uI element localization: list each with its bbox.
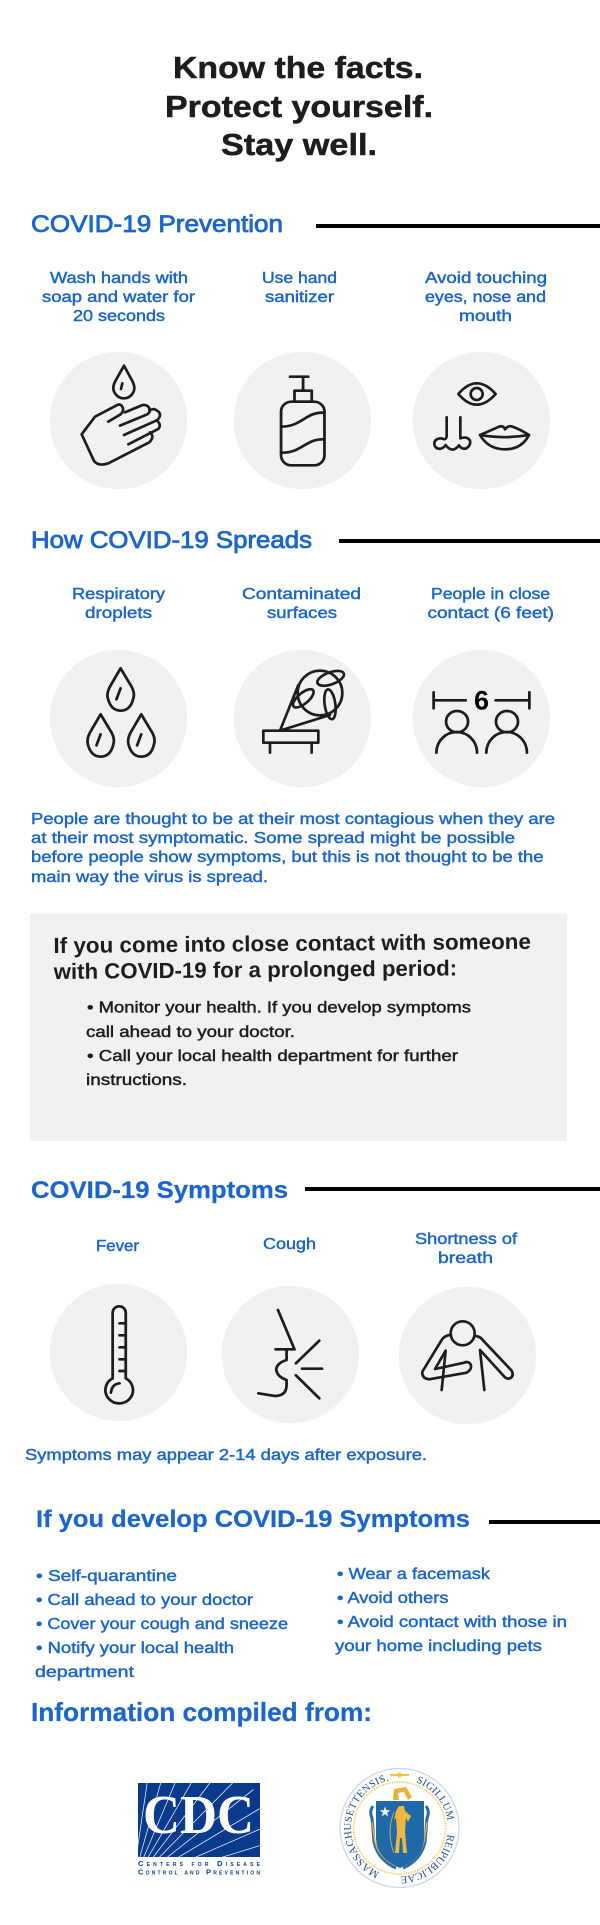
callout heading: If you come into close contact with someone <box>53 929 531 958</box>
logo: CDC: CDC <box>143 1784 254 1845</box>
title: Stay well. <box>221 127 377 162</box>
label: close contact: People in close <box>431 586 550 603</box>
label: respiratory droplets <box>72 586 165 622</box>
title: Know the facts. <box>173 50 423 85</box>
label: respiratory droplets: droplets <box>85 605 152 622</box>
icon: six feet distance: 6 <box>474 686 489 716</box>
icon: sanitizer bottle <box>234 352 371 489</box>
text block: contagion paragraph: main way the virus is spread. <box>31 869 268 886</box>
logo: Massachusetts state seal: REIPUBLICAE <box>401 1834 454 1884</box>
callout instructions: • Monitor your health. If you develop symptoms <box>87 1000 471 1016</box>
logo: Massachusetts state seal <box>339 1768 460 1888</box>
label: avoid touching: eyes, nose and <box>425 289 546 306</box>
label: contaminated surfaces: Contaminated <box>242 586 361 603</box>
logo: CDC: Control and Prevention <box>138 1868 260 1876</box>
list: left actions: • Cover your cough and sneeze <box>36 1616 288 1633</box>
list: right actions <box>335 1566 567 1655</box>
heading: information compiled from: Information compiled from: <box>31 1697 372 1727</box>
icon: contaminated surface <box>234 650 371 787</box>
label: hand sanitizer: sanitizer <box>265 289 335 306</box>
icon: shortness of breath <box>399 1287 536 1424</box>
icon: hand and water drop <box>50 352 187 489</box>
label: fever: Fever <box>96 1238 140 1255</box>
text block: contagion paragraph: before people show symptoms, but this is not thought to be the <box>31 849 544 866</box>
label: avoid touching: Avoid touching <box>425 270 547 287</box>
label: wash hands: 20 seconds <box>73 308 165 325</box>
callout instructions: call ahead to your doctor. <box>86 1024 295 1041</box>
label: hand sanitizer: Use hand <box>262 270 337 287</box>
icon: six feet distance <box>413 650 550 787</box>
list: right actions: your home including pets <box>335 1638 542 1655</box>
label: close contact <box>428 586 554 622</box>
heading: develop symptoms: If you develop COVID-19 Symptoms <box>36 1506 470 1533</box>
label: contaminated surfaces <box>242 586 361 622</box>
panel: if you develop symptoms <box>35 1506 600 1681</box>
logo: CDC <box>138 1783 260 1874</box>
heading: spreads: How COVID-19 Spreads <box>31 527 312 554</box>
label: contaminated surfaces: surfaces <box>267 605 337 622</box>
list: left actions <box>35 1568 288 1681</box>
title: Protect yourself. <box>165 89 433 124</box>
heading: prevention: COVID-19 Prevention <box>31 211 283 238</box>
panel: COVID-19 prevention <box>31 211 600 489</box>
icon: cough <box>222 1286 359 1423</box>
label: wash hands: soap and water for <box>42 289 196 306</box>
icon: three droplets <box>50 650 187 787</box>
logo: CDC: Centers for Disease <box>138 1859 261 1868</box>
label: shortness of breath: breath <box>438 1250 493 1267</box>
callout heading <box>52 929 531 984</box>
label: cough: Cough <box>263 1236 316 1253</box>
list: right actions: • Wear a facemask <box>337 1566 491 1583</box>
panel: sources <box>31 1697 460 1888</box>
panel: COVID-19 symptoms <box>25 1177 600 1464</box>
logo: Massachusetts state seal: SIGILLUM <box>416 1776 454 1820</box>
label: wash hands: Wash hands with <box>50 270 188 287</box>
panel: how COVID-19 spreads <box>31 527 600 886</box>
list: left actions: • Self-quarantine <box>36 1568 177 1585</box>
callout instructions: instructions. <box>86 1072 187 1089</box>
label: hand sanitizer <box>262 270 337 306</box>
panel: close contact callout <box>30 914 567 1141</box>
label: close contact: contact (6 feet) <box>428 605 554 622</box>
label: shortness of breath <box>415 1231 518 1267</box>
text: symptom onset: Symptoms may appear 2-14 days after exposure. <box>25 1447 427 1464</box>
callout heading: with COVID-19 for a prolonged period: <box>53 955 457 984</box>
text block: contagion paragraph: at their most symptomatic. Some spread might be possible <box>31 830 515 847</box>
heading: symptoms: COVID-19 Symptoms <box>31 1177 288 1204</box>
label: avoid touching: mouth <box>459 308 512 325</box>
label: avoid touching <box>425 270 547 325</box>
logo: Massachusetts state seal: MASSACHUSETTENSIS. <box>344 1775 388 1878</box>
label: shortness of breath: Shortness of <box>415 1231 518 1248</box>
title <box>165 50 433 162</box>
label: respiratory droplets: Respiratory <box>72 586 165 603</box>
list: left actions: • Notify your local health <box>36 1640 234 1657</box>
list: right actions: • Avoid contact with those in <box>337 1614 567 1631</box>
icon: thermometer <box>50 1284 187 1421</box>
list: left actions: • Call ahead to your doctor <box>36 1592 254 1609</box>
text block: contagion paragraph: People are thought to be at their most contagious when they are <box>31 811 555 828</box>
callout instructions: • Call your local health department for further <box>87 1048 459 1065</box>
list: left actions: department <box>35 1664 135 1681</box>
label: wash hands <box>42 270 196 325</box>
list: right actions: • Avoid others <box>337 1590 448 1607</box>
callout instructions <box>86 1000 471 1089</box>
icon: eye nose mouth <box>413 352 550 489</box>
text block: contagion paragraph <box>31 811 555 886</box>
